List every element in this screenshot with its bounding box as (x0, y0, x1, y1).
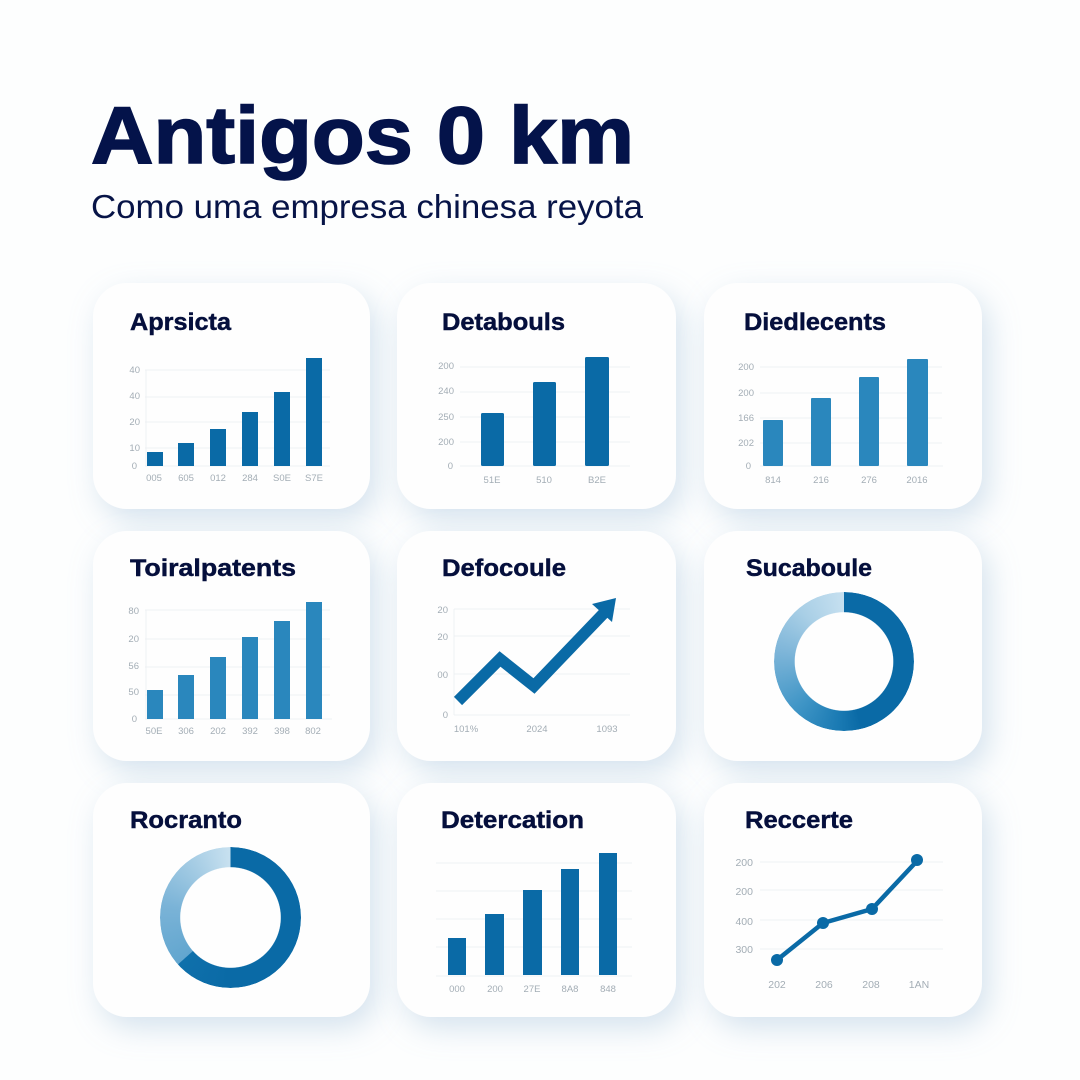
bar chart: Aprsicta: 605 (178, 473, 194, 484)
line chart: Defocoule: 0 (443, 710, 448, 721)
line chart: Reccerte: 200 (735, 857, 753, 869)
subtitle: Como uma empresa chinesa reyota (91, 188, 644, 225)
line chart: Defocoule: 1093 (596, 724, 618, 735)
bar chart: Aprsicta: 012 (210, 473, 226, 484)
line chart: Reccerte: 208 (862, 979, 880, 991)
bar chart: Diedlecents: 166 (738, 413, 754, 424)
bar chart: Detabouls: B2E (588, 475, 606, 486)
bar chart: Diedlecents: 200 (738, 362, 754, 373)
panel: Aprsicta bar chart (93, 283, 370, 509)
line chart: Reccerte: 206 (815, 979, 833, 991)
bar chart: Toiralpatents (128, 602, 332, 737)
bar chart: Toiralpatents: 392 (242, 726, 258, 737)
heading: Rocranto: Rocranto (130, 807, 242, 834)
bar chart: Aprsicta: 005 (146, 473, 162, 484)
bar chart: Detercation: 200 (487, 984, 503, 995)
title: Antigos 0 km (91, 91, 634, 181)
bar chart: Diedlecents: 202 (738, 438, 754, 449)
panel: Toiralpatents bar chart (93, 531, 370, 761)
line chart: Defocoule: 101% (454, 724, 479, 735)
bar chart: Diedlecents: 2016 (906, 475, 928, 486)
heading: Diedlecents: Diedlecents (744, 309, 886, 336)
heading: Toiralpatents: Toiralpatents (130, 555, 296, 582)
panel: Reccerte line chart (704, 783, 982, 1017)
line chart: Reccerte (735, 854, 943, 991)
bar chart: Toiralpatents: 20 (128, 634, 139, 645)
heading: Sucaboule: Sucaboule (746, 555, 872, 582)
bar chart: Aprsicta: 284 (242, 473, 258, 484)
line chart: Defocoule: 2024 (526, 724, 548, 735)
line chart: Defocoule: 20 (437, 605, 448, 616)
panel: Defocoule line arrow chart (397, 531, 676, 761)
panel: Diedlecents bar chart (704, 283, 982, 509)
bar chart: Toiralpatents: 306 (178, 726, 194, 737)
bar chart: Detercation: 8A8 (562, 984, 578, 995)
heading: Aprsicta: Aprsicta (130, 309, 232, 336)
bar chart: Toiralpatents: 202 (210, 726, 226, 737)
bar chart: Detercation: 27E (524, 984, 540, 995)
bar chart: Detabouls: 240 (438, 386, 454, 397)
line chart: Defocoule: 20 (437, 632, 448, 643)
bar chart: Toiralpatents: 56 (128, 661, 139, 672)
line chart: Reccerte: 202 (768, 979, 786, 991)
bar chart: Aprsicta: 20 (129, 417, 140, 428)
line chart: Reccerte: 300 (735, 944, 753, 956)
bar chart: Toiralpatents: 398 (274, 726, 290, 737)
bar chart: Aprsicta: 40 (129, 365, 140, 376)
bar chart: Aprsicta: 0 (132, 461, 137, 472)
bar chart: Aprsicta (129, 358, 330, 484)
bar chart: Toiralpatents: 0 (132, 714, 137, 725)
bar chart: Detabouls: 510 (536, 475, 552, 486)
bar chart: Aprsicta: S0E (273, 473, 291, 484)
bar chart: Detabouls: 51E (484, 475, 500, 486)
panel: Sucaboule donut chart (704, 531, 982, 761)
heading: Detabouls: Detabouls (442, 309, 565, 336)
heading: Defocoule: Defocoule (442, 555, 566, 582)
bar chart: Diedlecents: 276 (861, 475, 877, 486)
panel: Rocranto donut chart (93, 783, 370, 1017)
panel: Detercation bar chart (397, 783, 676, 1017)
bar chart: Detercation: 848 (600, 984, 616, 995)
line chart: Reccerte: 200 (735, 886, 753, 898)
bar chart: Aprsicta: S7E (305, 473, 323, 484)
bar chart: Detabouls: 200 (438, 437, 454, 448)
bar chart: Toiralpatents: 802 (305, 726, 321, 737)
bar chart: Detercation: 000 (449, 984, 465, 995)
bar chart: Toiralpatents: 50 (128, 687, 139, 698)
arrow: rising trend (458, 598, 616, 701)
bar chart: Diedlecents: 814 (765, 475, 781, 486)
heading: Detercation: Detercation (441, 807, 584, 834)
bar chart: Diedlecents: 0 (746, 461, 751, 472)
bar chart: Detabouls: 250 (438, 412, 454, 423)
line chart: Reccerte: 1AN (909, 979, 929, 991)
bar chart: Toiralpatents: 50E (146, 726, 162, 737)
bar chart: Detabouls: 0 (448, 461, 453, 472)
line chart: Reccerte: 400 (735, 916, 753, 928)
bar chart: Aprsicta: 40 (129, 391, 140, 402)
bar chart: Detercation (436, 853, 632, 995)
bar chart: Toiralpatents: 80 (128, 606, 139, 617)
donut chart: Sucaboule (774, 592, 914, 731)
bar chart: Detabouls: 200 (438, 361, 454, 372)
panel: Detabouls bar chart (397, 283, 676, 509)
bar chart: Diedlecents: 216 (813, 475, 829, 486)
bar chart: Diedlecents: 200 (738, 388, 754, 399)
donut chart: Rocranto (160, 847, 300, 988)
line chart: Defocoule: 00 (437, 670, 448, 681)
line chart: Defocoule (437, 598, 630, 735)
heading: Reccerte: Reccerte (745, 807, 853, 834)
bar chart: Diedlecents (738, 359, 943, 486)
bar chart: Aprsicta: 10 (129, 443, 140, 454)
bar chart: Detabouls (438, 357, 630, 486)
